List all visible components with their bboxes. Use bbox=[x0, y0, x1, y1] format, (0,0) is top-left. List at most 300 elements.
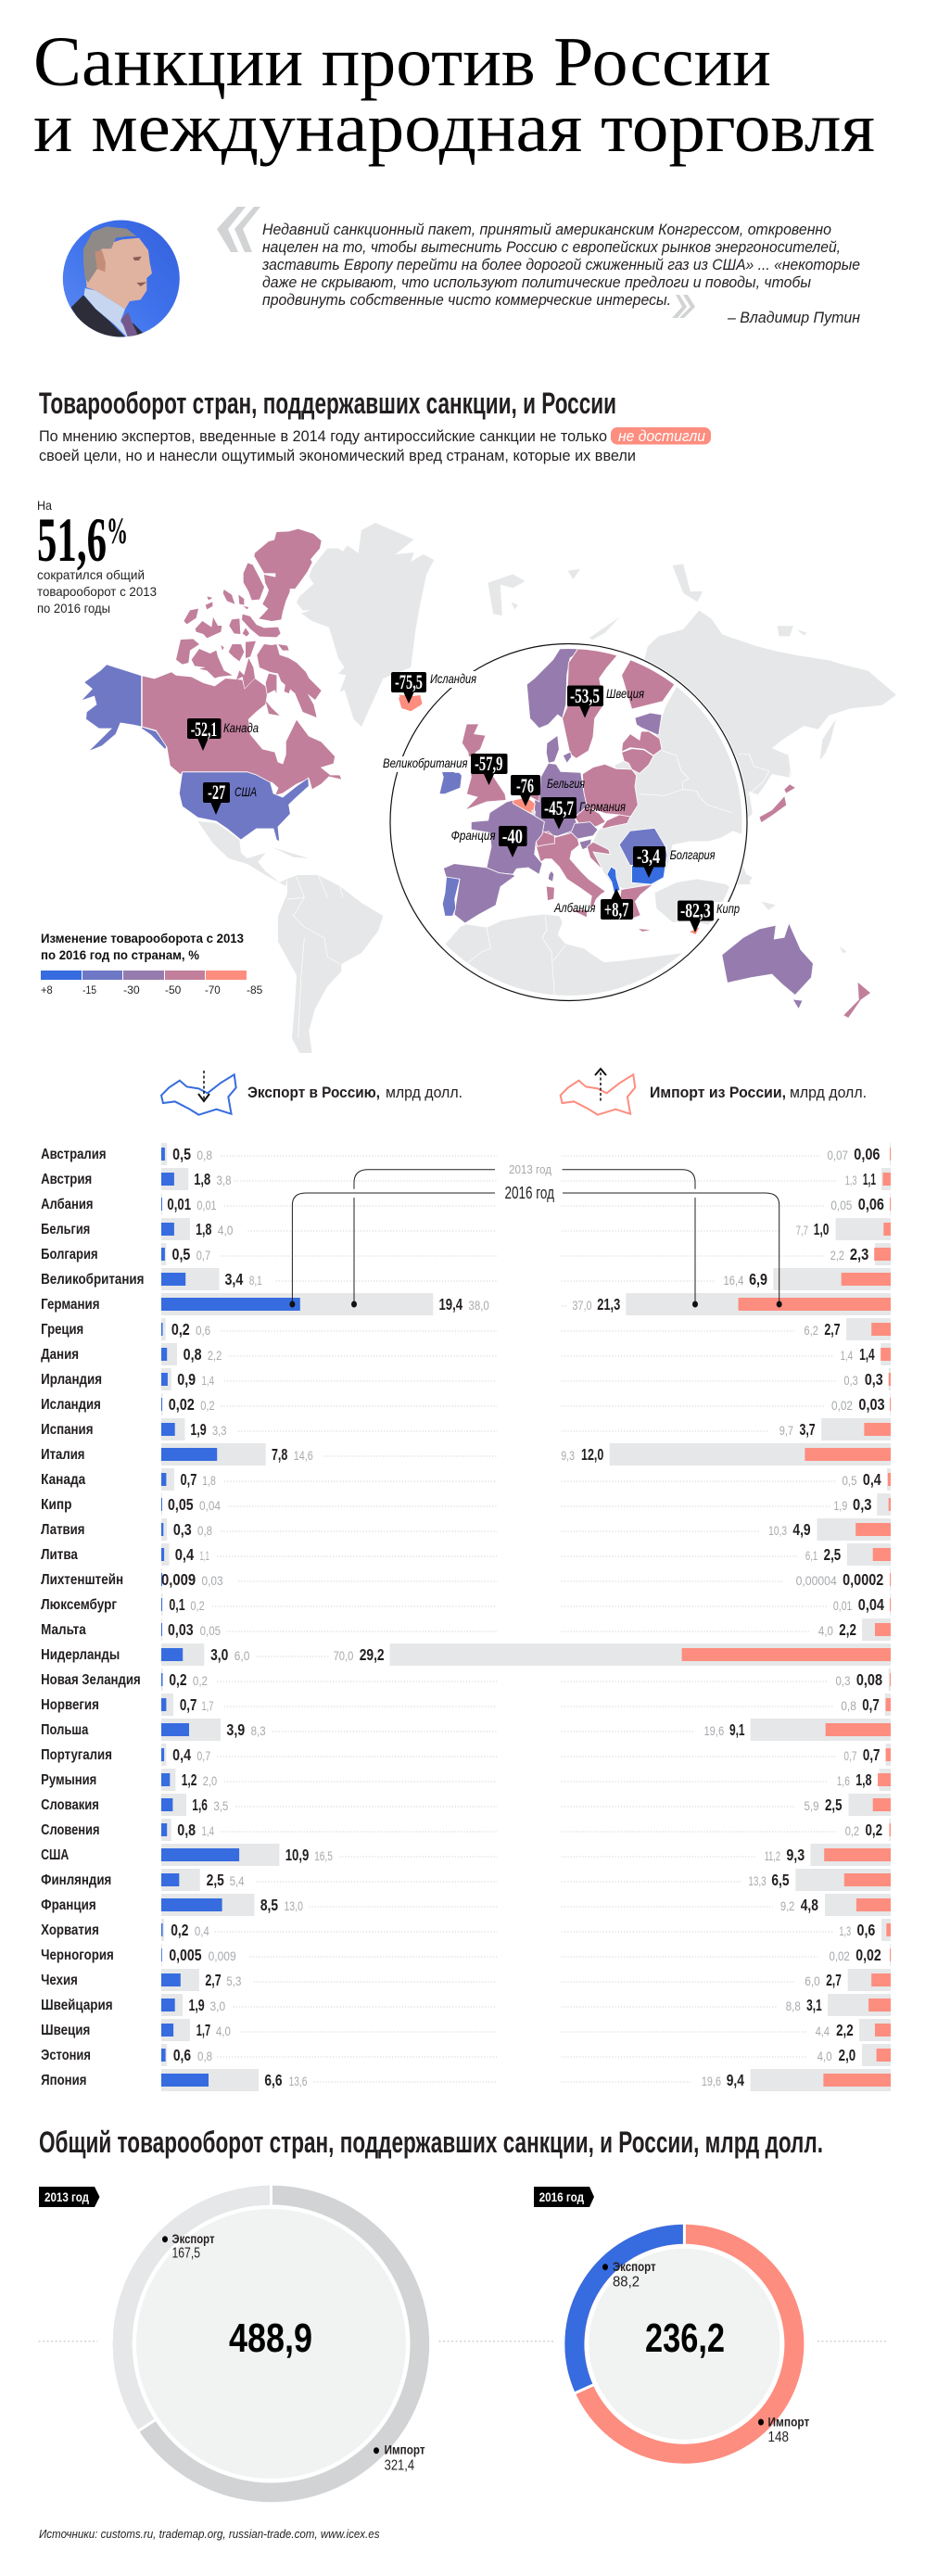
row: Германия: Германия bbox=[41, 1296, 99, 1313]
map legend: по 2016 год по странам, % bbox=[41, 947, 200, 962]
row: Словакия: 2,5 bbox=[825, 1797, 843, 1815]
row: Греция: Греция bbox=[41, 1321, 83, 1338]
row: Новая Зеландия: 0,2 bbox=[193, 1674, 208, 1689]
row: Португалия: 0,7 bbox=[843, 1749, 857, 1764]
table: export and import by country bbox=[41, 1143, 891, 2091]
row: Япония: 13,6 bbox=[289, 2075, 308, 2089]
row: Австрия bbox=[41, 1168, 891, 1190]
row: Канада: 0,4 bbox=[863, 1472, 882, 1490]
marker: Sweden bbox=[567, 684, 644, 717]
row: Австрия: 3,8 bbox=[217, 1174, 232, 1188]
row: Эстония: 4,0 bbox=[817, 2049, 832, 2064]
row: Литва: 0,4 bbox=[175, 1547, 195, 1565]
Belgium bbox=[513, 797, 535, 814]
row: Черногория: 0,005 bbox=[169, 1948, 202, 1965]
marker: Belgium bbox=[511, 774, 585, 806]
row: Дания: 1,4 bbox=[841, 1349, 853, 1364]
Poland bbox=[582, 764, 638, 818]
row: Латвия bbox=[41, 1518, 891, 1541]
tag: 2013: 2013 год bbox=[44, 2190, 89, 2204]
Slovenia bbox=[580, 840, 591, 849]
row: Франция bbox=[41, 1894, 891, 1916]
Portugal bbox=[442, 877, 460, 916]
row: Литва: 6,1 bbox=[805, 1549, 817, 1564]
header: import from Russia: Импорт из России, bbox=[650, 1084, 786, 1101]
row: Кипр: 0,3 bbox=[853, 1497, 872, 1515]
row: Болгария bbox=[41, 1243, 891, 1265]
row: Лихтенштейн: 0,009 bbox=[161, 1572, 196, 1590]
USA bbox=[179, 772, 309, 842]
row: Испания: 1,9 bbox=[190, 1422, 207, 1440]
row: Португалия: 0,4 bbox=[172, 1747, 192, 1765]
marker: USA: США bbox=[234, 784, 257, 799]
row: Словакия: Словакия bbox=[41, 1796, 99, 1813]
Canada mainland bbox=[142, 672, 342, 795]
Lithuania bbox=[622, 749, 653, 773]
row: Люксембург: 0,1 bbox=[169, 1597, 185, 1615]
row: Австрия: 1,3 bbox=[845, 1174, 857, 1188]
row: Канада: 0,7 bbox=[180, 1472, 196, 1490]
row: Австрия: Австрия bbox=[41, 1171, 92, 1187]
intro text: По мнению экспертов, введенные в 2014 году антироссийские санкции не только bbox=[39, 427, 607, 445]
row: Исландия: 0,02 bbox=[831, 1399, 853, 1414]
Croatia bbox=[587, 842, 610, 869]
marker: Albania bbox=[553, 888, 633, 921]
row: Литва bbox=[41, 1543, 891, 1566]
row: Латвия: 10,3 bbox=[768, 1524, 787, 1539]
annotation: 2013 and 2016 year callouts: 2016 год bbox=[504, 1184, 554, 1202]
header: export to Russia bbox=[161, 1071, 462, 1115]
marker: Germany: -45,7 bbox=[544, 796, 574, 819]
marker: Germany bbox=[541, 796, 626, 830]
row: Румыния bbox=[41, 1769, 891, 1791]
row: Мальта: 0,05 bbox=[200, 1624, 221, 1639]
row: Черногория: 0,02 bbox=[855, 1948, 881, 1965]
row: Румыния: 1,6 bbox=[837, 1774, 850, 1789]
stat: 51,6%: % bbox=[107, 510, 128, 552]
marker: Canada: Канада bbox=[223, 720, 259, 735]
row: США: 9,3 bbox=[786, 1847, 805, 1865]
sources: Источники: customs.ru, trademap.org, russian-trade.com, www.icex.es bbox=[39, 2527, 380, 2541]
row: Чехия bbox=[41, 1969, 891, 1991]
row: Австралия: 0,5 bbox=[172, 1147, 191, 1164]
annotation: 2013 and 2016 year callouts bbox=[289, 1162, 782, 1307]
label: export 2016: 88,2 bbox=[613, 2275, 640, 2290]
marker: France bbox=[451, 824, 527, 857]
France bbox=[471, 800, 544, 874]
row: Кипр: 0,04 bbox=[199, 1499, 221, 1514]
row: Бельгия: 1,8 bbox=[196, 1222, 211, 1239]
tag: 2016 bbox=[534, 2187, 594, 2207]
Austria bbox=[554, 822, 598, 839]
row: Португалия: 0,7 bbox=[863, 1747, 880, 1765]
intro text bbox=[39, 427, 711, 464]
Norway bbox=[526, 647, 579, 729]
map: Europe inset bbox=[436, 647, 747, 1015]
title bbox=[33, 23, 875, 167]
marker: Bulgaria: Болгария bbox=[670, 847, 716, 862]
row: Португалия: Португалия bbox=[41, 1746, 112, 1763]
Finland bbox=[622, 659, 675, 709]
row: Хорватия: 0,6 bbox=[857, 1922, 875, 1940]
row: Бельгия: Бельгия bbox=[41, 1221, 90, 1237]
label: import 2013: 321,4 bbox=[385, 2457, 414, 2473]
Corsica bbox=[549, 871, 553, 882]
row: Мальта: 2,2 bbox=[839, 1622, 856, 1640]
row: Испания: Испания bbox=[41, 1421, 93, 1438]
row: Хорватия: 0,4 bbox=[195, 1924, 209, 1939]
header: export to Russia: Экспорт в Россию, bbox=[247, 1084, 380, 1101]
row: Эстония: Эстония bbox=[41, 2047, 91, 2063]
row: Испания bbox=[41, 1418, 891, 1440]
header: import from Russia bbox=[561, 1069, 867, 1115]
row: Болгария: 2,2 bbox=[830, 1249, 844, 1263]
row: Мальта: 4,0 bbox=[818, 1624, 833, 1639]
row: Канада: 1,8 bbox=[202, 1474, 216, 1489]
icon: opening quote mark bbox=[217, 207, 260, 252]
row: Мальта bbox=[41, 1618, 891, 1641]
quote: продвинуть собственные чисто коммерческие интересы. bbox=[262, 292, 671, 309]
map legend: -15 bbox=[82, 983, 96, 996]
label masks bbox=[382, 671, 741, 919]
row: Франция: 4,8 bbox=[801, 1897, 818, 1915]
row: Дания: Дания bbox=[41, 1346, 79, 1363]
row: Польша bbox=[41, 1719, 891, 1741]
row: Нидерланды: 70,0 bbox=[334, 1649, 354, 1664]
row: Норвегия bbox=[41, 1694, 891, 1716]
row: Япония bbox=[41, 2069, 891, 2091]
row: Австралия: 0,06 bbox=[854, 1147, 880, 1164]
row: Польша: 19,6 bbox=[703, 1724, 725, 1739]
row: Австралия: Австралия bbox=[41, 1146, 107, 1162]
stat: 51,6%: сократился общий bbox=[37, 567, 145, 582]
Albania bbox=[607, 867, 620, 893]
row: Канада: Канада bbox=[41, 1471, 86, 1488]
intro text: не достигли bbox=[618, 427, 706, 445]
row: Финляндия: 13,3 bbox=[748, 1874, 767, 1889]
row: Литва: Литва bbox=[41, 1546, 79, 1563]
row: Италия: Италия bbox=[41, 1446, 84, 1463]
row: Греция: 6,2 bbox=[805, 1324, 818, 1339]
stat: 51,6%: На bbox=[37, 498, 52, 513]
Estonia bbox=[635, 713, 662, 735]
row: Кипр: 0,05 bbox=[168, 1497, 194, 1515]
row: Кипр: 1,9 bbox=[834, 1499, 847, 1514]
row: Польша: 8,3 bbox=[251, 1724, 266, 1739]
row: Польша: Польша bbox=[41, 1721, 89, 1738]
row: Испания: 9,7 bbox=[779, 1424, 793, 1439]
row: Нидерланды bbox=[41, 1643, 891, 1666]
row: Ирландия: 0,3 bbox=[843, 1374, 858, 1389]
map: Iceland bbox=[399, 695, 423, 709]
row: Бельгия: 1,0 bbox=[814, 1222, 829, 1239]
row: Чехия: 2,7 bbox=[205, 1973, 222, 1990]
row: Новая Зеландия: 0,08 bbox=[856, 1672, 882, 1690]
map legend bbox=[41, 931, 263, 996]
New Zealand bbox=[843, 983, 870, 1018]
quote: – Владимир Путин bbox=[727, 310, 860, 326]
inset circle outline bbox=[390, 643, 747, 1001]
row: Хорватия: Хорватия bbox=[41, 1922, 99, 1938]
row: Словакия: 3,5 bbox=[213, 1799, 229, 1814]
row: Швеция bbox=[41, 2019, 891, 2041]
marker: Bulgaria bbox=[633, 844, 716, 878]
row: Ирландия bbox=[41, 1368, 891, 1390]
row: Черногория: Черногория bbox=[41, 1947, 114, 1963]
eastern Europe land bbox=[592, 684, 747, 890]
row: Великобритания: Великобритания bbox=[41, 1271, 144, 1288]
label: import 2013 bbox=[374, 2443, 425, 2473]
row: Румыния: 1,2 bbox=[182, 1772, 196, 1790]
row: Чехия: 2,7 bbox=[826, 1973, 842, 1990]
Quebec north islands bbox=[266, 675, 292, 716]
row: Норвегия: 0,7 bbox=[862, 1697, 880, 1715]
row: Хорватия: 0,2 bbox=[171, 1922, 188, 1940]
row: Германия: 19,4 bbox=[438, 1297, 463, 1314]
row: Кипр: Кипр bbox=[41, 1496, 71, 1513]
row: Мальта: 0,03 bbox=[168, 1622, 194, 1640]
row: США: 16,5 bbox=[314, 1849, 333, 1864]
row: Япония: 19,6 bbox=[702, 2075, 721, 2089]
title: Санкции против России bbox=[33, 23, 771, 101]
Switzerland bbox=[535, 831, 554, 846]
row: Исландия: Исландия bbox=[41, 1396, 101, 1413]
map legend: +8 bbox=[41, 983, 53, 996]
map: Asia-Pacific countries bbox=[722, 784, 870, 1018]
label: import 2016 bbox=[758, 2414, 809, 2445]
marker: Albania: +8,7 bbox=[604, 898, 628, 921]
donut chart: 2013 bbox=[122, 2184, 425, 2493]
quote: Недавний санкционный пакет, принятый американским Конгрессом, откровенно bbox=[262, 222, 831, 238]
row: США: 11,2 bbox=[765, 1849, 780, 1864]
Bulgaria bbox=[632, 866, 665, 884]
row: Дания bbox=[41, 1343, 891, 1365]
icon: Russia outline with down arrow bbox=[161, 1074, 236, 1115]
marker: Canada bbox=[187, 717, 259, 751]
row: Латвия: 4,9 bbox=[792, 1522, 811, 1540]
row: Латвия: 0,3 bbox=[173, 1522, 192, 1540]
row: Эстония: 0,6 bbox=[173, 2048, 191, 2065]
marker: Iceland: -75,5 bbox=[395, 670, 423, 693]
marker: Belgium: -76 bbox=[516, 774, 534, 797]
row: Лихтенштейн: 0,00004 bbox=[796, 1574, 837, 1589]
row: Греция: 2,7 bbox=[824, 1322, 841, 1339]
stat: 51,6%: 51,6 bbox=[37, 504, 107, 575]
row: Италия: 14,6 bbox=[294, 1449, 313, 1464]
quote bbox=[217, 207, 860, 326]
row: Великобритания: 16,4 bbox=[724, 1274, 744, 1288]
marker: Albania: Албания bbox=[553, 900, 596, 915]
row: Япония: 6,6 bbox=[264, 2073, 283, 2090]
Ireland bbox=[439, 772, 462, 793]
row: Италия: 7,8 bbox=[272, 1447, 287, 1465]
intro text: своей цели, но и нанесли ощутимый экономический вред странам, которые их ввели bbox=[39, 447, 636, 464]
Denmark bbox=[546, 735, 572, 763]
North Africa bbox=[445, 914, 682, 996]
marker: United Kingdom: Великобритания bbox=[383, 755, 468, 770]
tag: 2013 bbox=[39, 2187, 100, 2207]
row: Нидерланды: Нидерланды bbox=[41, 1646, 120, 1663]
row: Швеция: 4,0 bbox=[216, 2024, 231, 2039]
row: Словакия: 1,6 bbox=[192, 1797, 208, 1815]
row: Словакия: 5,9 bbox=[805, 1799, 819, 1814]
row: Испания: 3,3 bbox=[212, 1424, 227, 1439]
row: Албания: 0,01 bbox=[196, 1199, 217, 1213]
tag: 2016: 2016 год bbox=[539, 2190, 584, 2204]
row: Норвегия: 0,7 bbox=[180, 1697, 196, 1715]
row: Кипр bbox=[41, 1493, 891, 1516]
map: white ring around Europe inset bbox=[389, 642, 749, 1002]
donut chart: 2016: 236,2 bbox=[645, 2316, 725, 2361]
row: Швейцария: 3,1 bbox=[806, 1998, 822, 2015]
row: Финляндия: 5,4 bbox=[230, 1874, 245, 1889]
row: Литва: 1,1 bbox=[200, 1549, 209, 1564]
row: Германия: 38,0 bbox=[468, 1299, 489, 1313]
row: Греция: 0,2 bbox=[171, 1322, 190, 1339]
row: Ирландия: 0,3 bbox=[865, 1372, 883, 1390]
Japan bbox=[759, 784, 795, 822]
United Kingdom bbox=[454, 724, 506, 810]
row: Финляндия bbox=[41, 1869, 891, 1891]
donut chart: 2013: 488,9 bbox=[229, 2316, 312, 2361]
row: Швейцария: 3,0 bbox=[209, 1999, 226, 2014]
row: Германия: 37,0 bbox=[572, 1299, 592, 1313]
row: Чехия: Чехия bbox=[41, 1972, 78, 1988]
row: Ирландия: 1,4 bbox=[202, 1374, 214, 1389]
row: Германия bbox=[41, 1293, 891, 1315]
row: Словения: Словения bbox=[41, 1821, 99, 1838]
row: Лихтенштейн bbox=[41, 1568, 891, 1591]
dotted guide line bbox=[39, 2341, 888, 2342]
row: Латвия: Латвия bbox=[41, 1521, 84, 1538]
label: export 2016 bbox=[602, 2259, 656, 2290]
row: Финляндия: 6,5 bbox=[771, 1872, 790, 1890]
row: Австралия: 0,07 bbox=[828, 1148, 848, 1163]
row: Люксембург bbox=[41, 1593, 891, 1616]
row: Болгария: 2,3 bbox=[850, 1247, 868, 1264]
row: Финляндия: Финляндия bbox=[41, 1872, 111, 1888]
row: Чехия: 5,3 bbox=[226, 1974, 242, 1989]
row: Исландия bbox=[41, 1393, 891, 1415]
row: Норвегия: 1,7 bbox=[202, 1699, 213, 1714]
marker: Sweden: -53,5 bbox=[570, 684, 600, 707]
marker: Germany: Германия bbox=[579, 799, 626, 814]
Luxembourg bbox=[531, 809, 536, 816]
row: Румыния: Румыния bbox=[41, 1771, 96, 1788]
row: Болгария: 0,5 bbox=[172, 1247, 190, 1264]
row: Бельгия: 7,7 bbox=[796, 1224, 808, 1238]
map legend: -50 bbox=[165, 983, 182, 996]
row: Мальта: Мальта bbox=[41, 1621, 87, 1638]
row: Швеция: 1,7 bbox=[196, 2023, 210, 2040]
row: Люксембург: Люксембург bbox=[41, 1596, 118, 1613]
row: Великобритания bbox=[41, 1268, 891, 1290]
row: Эстония bbox=[41, 2044, 891, 2066]
quote: нацелен на то, чтобы вытеснить Россию с европейских рынков энергоносителей, bbox=[262, 239, 841, 256]
row: Нидерланды: 29,2 bbox=[360, 1647, 385, 1665]
Greece bbox=[619, 884, 653, 932]
row: Литва: 2,5 bbox=[824, 1547, 841, 1565]
row: Дания: 0,8 bbox=[184, 1347, 202, 1364]
label: import 2016: 148 bbox=[767, 2430, 789, 2445]
row: Португалия: 0,7 bbox=[196, 1749, 210, 1764]
Czech Republic bbox=[575, 806, 605, 827]
row: Италия: 9,3 bbox=[561, 1449, 575, 1464]
row: Новая Зеландия: 0,3 bbox=[835, 1674, 851, 1689]
marker: Cyprus: Кипр bbox=[716, 901, 740, 916]
row: Польша: 9,1 bbox=[729, 1722, 745, 1740]
Cyprus bbox=[690, 927, 699, 934]
row: Германия: 21,3 bbox=[597, 1297, 620, 1314]
annotation: 2013 and 2016 year callouts: 2013 год bbox=[509, 1162, 551, 1176]
row: Исландия: 0,2 bbox=[200, 1399, 215, 1414]
row: Греция: 0,6 bbox=[196, 1324, 211, 1339]
row: Словения: 0,2 bbox=[845, 1824, 859, 1839]
row: Новая Зеландия bbox=[41, 1669, 891, 1691]
row: Словения: 1,4 bbox=[202, 1824, 214, 1839]
row: Люксембург: 0,2 bbox=[190, 1599, 205, 1614]
marker: France: -40 bbox=[502, 824, 523, 847]
marker: Sweden: Швеция bbox=[606, 686, 644, 701]
row: Великобритания: 8,1 bbox=[249, 1274, 262, 1288]
Romania bbox=[619, 828, 667, 866]
row: Франция: 8,5 bbox=[260, 1897, 278, 1915]
row: Словакия bbox=[41, 1794, 891, 1816]
Spain bbox=[443, 864, 515, 923]
row: Норвегия: Норвегия bbox=[41, 1696, 99, 1713]
row: Италия bbox=[41, 1443, 891, 1466]
marker: Cyprus: -82,3 bbox=[680, 898, 711, 921]
row: Португалия bbox=[41, 1744, 891, 1766]
portrait photo bbox=[62, 220, 181, 341]
heading: turnover: Товарооборот стран, поддержавших санкции, и России bbox=[39, 387, 616, 420]
row: Латвия: 0,8 bbox=[197, 1524, 212, 1539]
row: Дания: 2,2 bbox=[208, 1349, 222, 1364]
row: Япония: Япония bbox=[41, 2072, 86, 2088]
header: import from Russia: млрд долл. bbox=[790, 1084, 867, 1101]
row: Япония: 9,4 bbox=[727, 2073, 745, 2090]
row: Албания: 0,01 bbox=[167, 1197, 191, 1214]
row: Швейцария bbox=[41, 1994, 891, 2016]
row: Нидерланды: 6,0 bbox=[234, 1649, 250, 1664]
Netherlands bbox=[528, 777, 540, 802]
row: Исландия: 0,02 bbox=[169, 1397, 195, 1415]
map: North America bbox=[81, 529, 422, 842]
map legend: Изменение товарооборота с 2013 bbox=[41, 931, 244, 945]
header: export to Russia: млрд долл. bbox=[386, 1084, 462, 1101]
label: import 2013: Импорт bbox=[385, 2443, 425, 2457]
row: Австрия: 1,1 bbox=[863, 1172, 876, 1189]
Sweden bbox=[563, 647, 619, 758]
row: Канада bbox=[41, 1468, 891, 1491]
label: export 2013 bbox=[162, 2231, 215, 2262]
marker: Iceland: Исландия bbox=[430, 671, 476, 686]
row: Исландия: 0,03 bbox=[858, 1397, 885, 1415]
row: Лихтенштейн: Лихтенштейн bbox=[41, 1571, 123, 1588]
Canadian Arctic islands bbox=[176, 529, 322, 717]
Turkey bbox=[654, 879, 729, 925]
marker: United Kingdom bbox=[383, 752, 508, 785]
label: export 2013: 167,5 bbox=[172, 2246, 200, 2262]
marker: Iceland bbox=[391, 670, 476, 704]
stat: 51,6%: товарооборот с 2013 bbox=[37, 584, 157, 599]
row: Швеция: 2,2 bbox=[836, 2023, 854, 2040]
row: Чехия: 6,0 bbox=[805, 1974, 820, 1989]
row: США: США bbox=[41, 1846, 70, 1863]
row: Лихтенштейн: 0,03 bbox=[202, 1574, 223, 1589]
row: США bbox=[41, 1844, 891, 1866]
map legend: -30 bbox=[123, 983, 140, 996]
